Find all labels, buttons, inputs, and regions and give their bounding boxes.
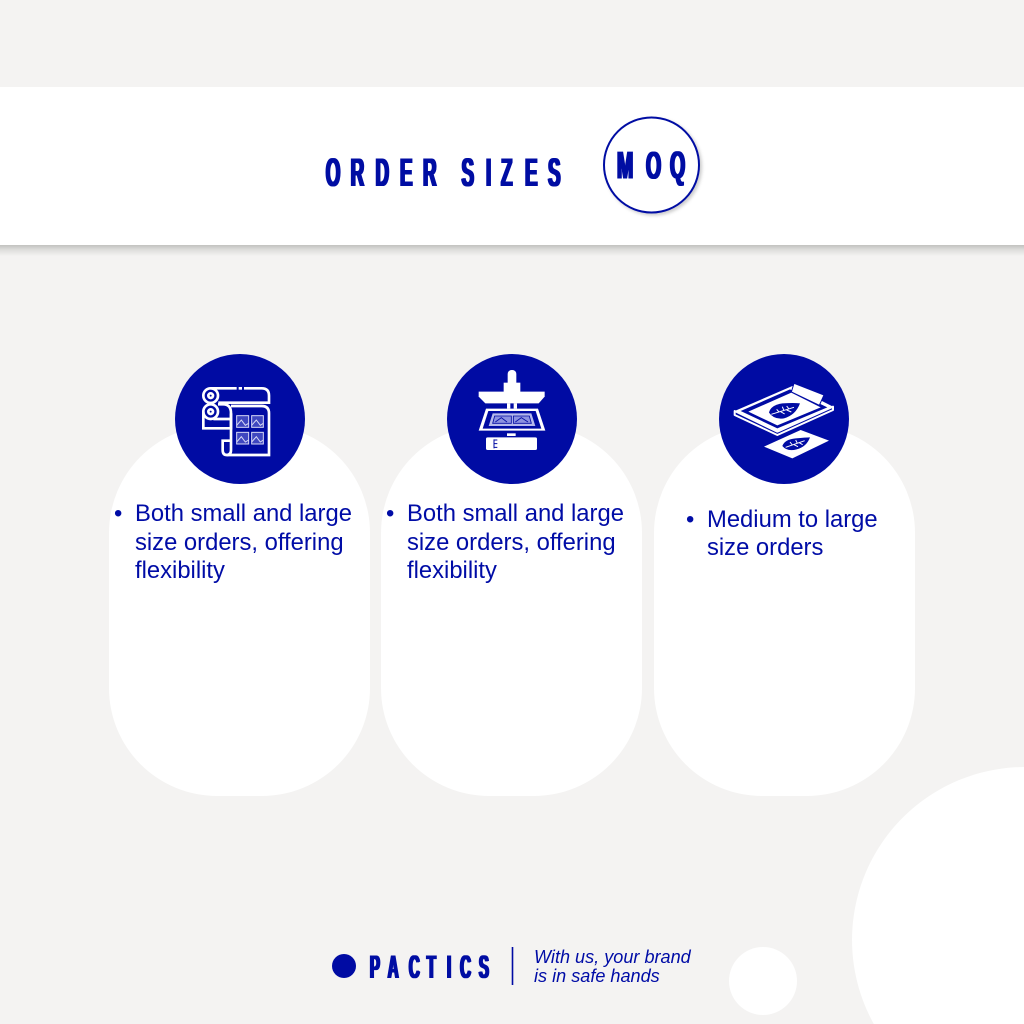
text: card 1 bullets: flexibility [135,557,225,584]
text: card 2 bullets: flexibility [407,557,497,584]
text: card 3 bullets [686,506,878,561]
icon: roll printer [175,354,305,484]
decorative small circle [729,947,797,1015]
text: card 2 bullets [386,500,624,584]
badge: MOQ: MOQ [617,143,685,187]
leaf on frame [769,403,800,419]
text: card 3 bullets: Medium to large [707,506,878,533]
text: card 1 bullets: Both small and large [135,500,352,527]
icon: heat press [447,354,577,484]
panel: card 3 [654,425,915,796]
header band [0,87,1024,256]
text: card 2 bullets: size orders, offering [407,529,616,556]
panel: card 1 [109,425,370,796]
leaf on sheet [782,437,810,450]
icon: screen print frame [719,354,849,484]
footer tagline: With us, your brand [534,947,692,967]
panel: card 2 [381,425,642,796]
title: order sizes: ORDER SIZES [326,150,561,195]
text: card 2 bullets: Both small and large [407,500,624,527]
text: card 3 bullets: • [686,506,694,533]
decorative large circle [852,767,1024,1024]
text: card 2 bullets: • [386,500,394,527]
footer tagline [534,947,692,986]
text: card 3 bullets: size orders [707,534,823,561]
footer tagline: is in safe hands [534,966,660,986]
text: card 1 bullets: • [114,500,122,527]
footer logo: PACTICS [370,950,489,986]
text: card 1 bullets: size orders, offering [135,529,344,556]
text: card 1 bullets [114,500,352,584]
footer divider [512,947,513,985]
badge: MOQ [604,118,699,212]
